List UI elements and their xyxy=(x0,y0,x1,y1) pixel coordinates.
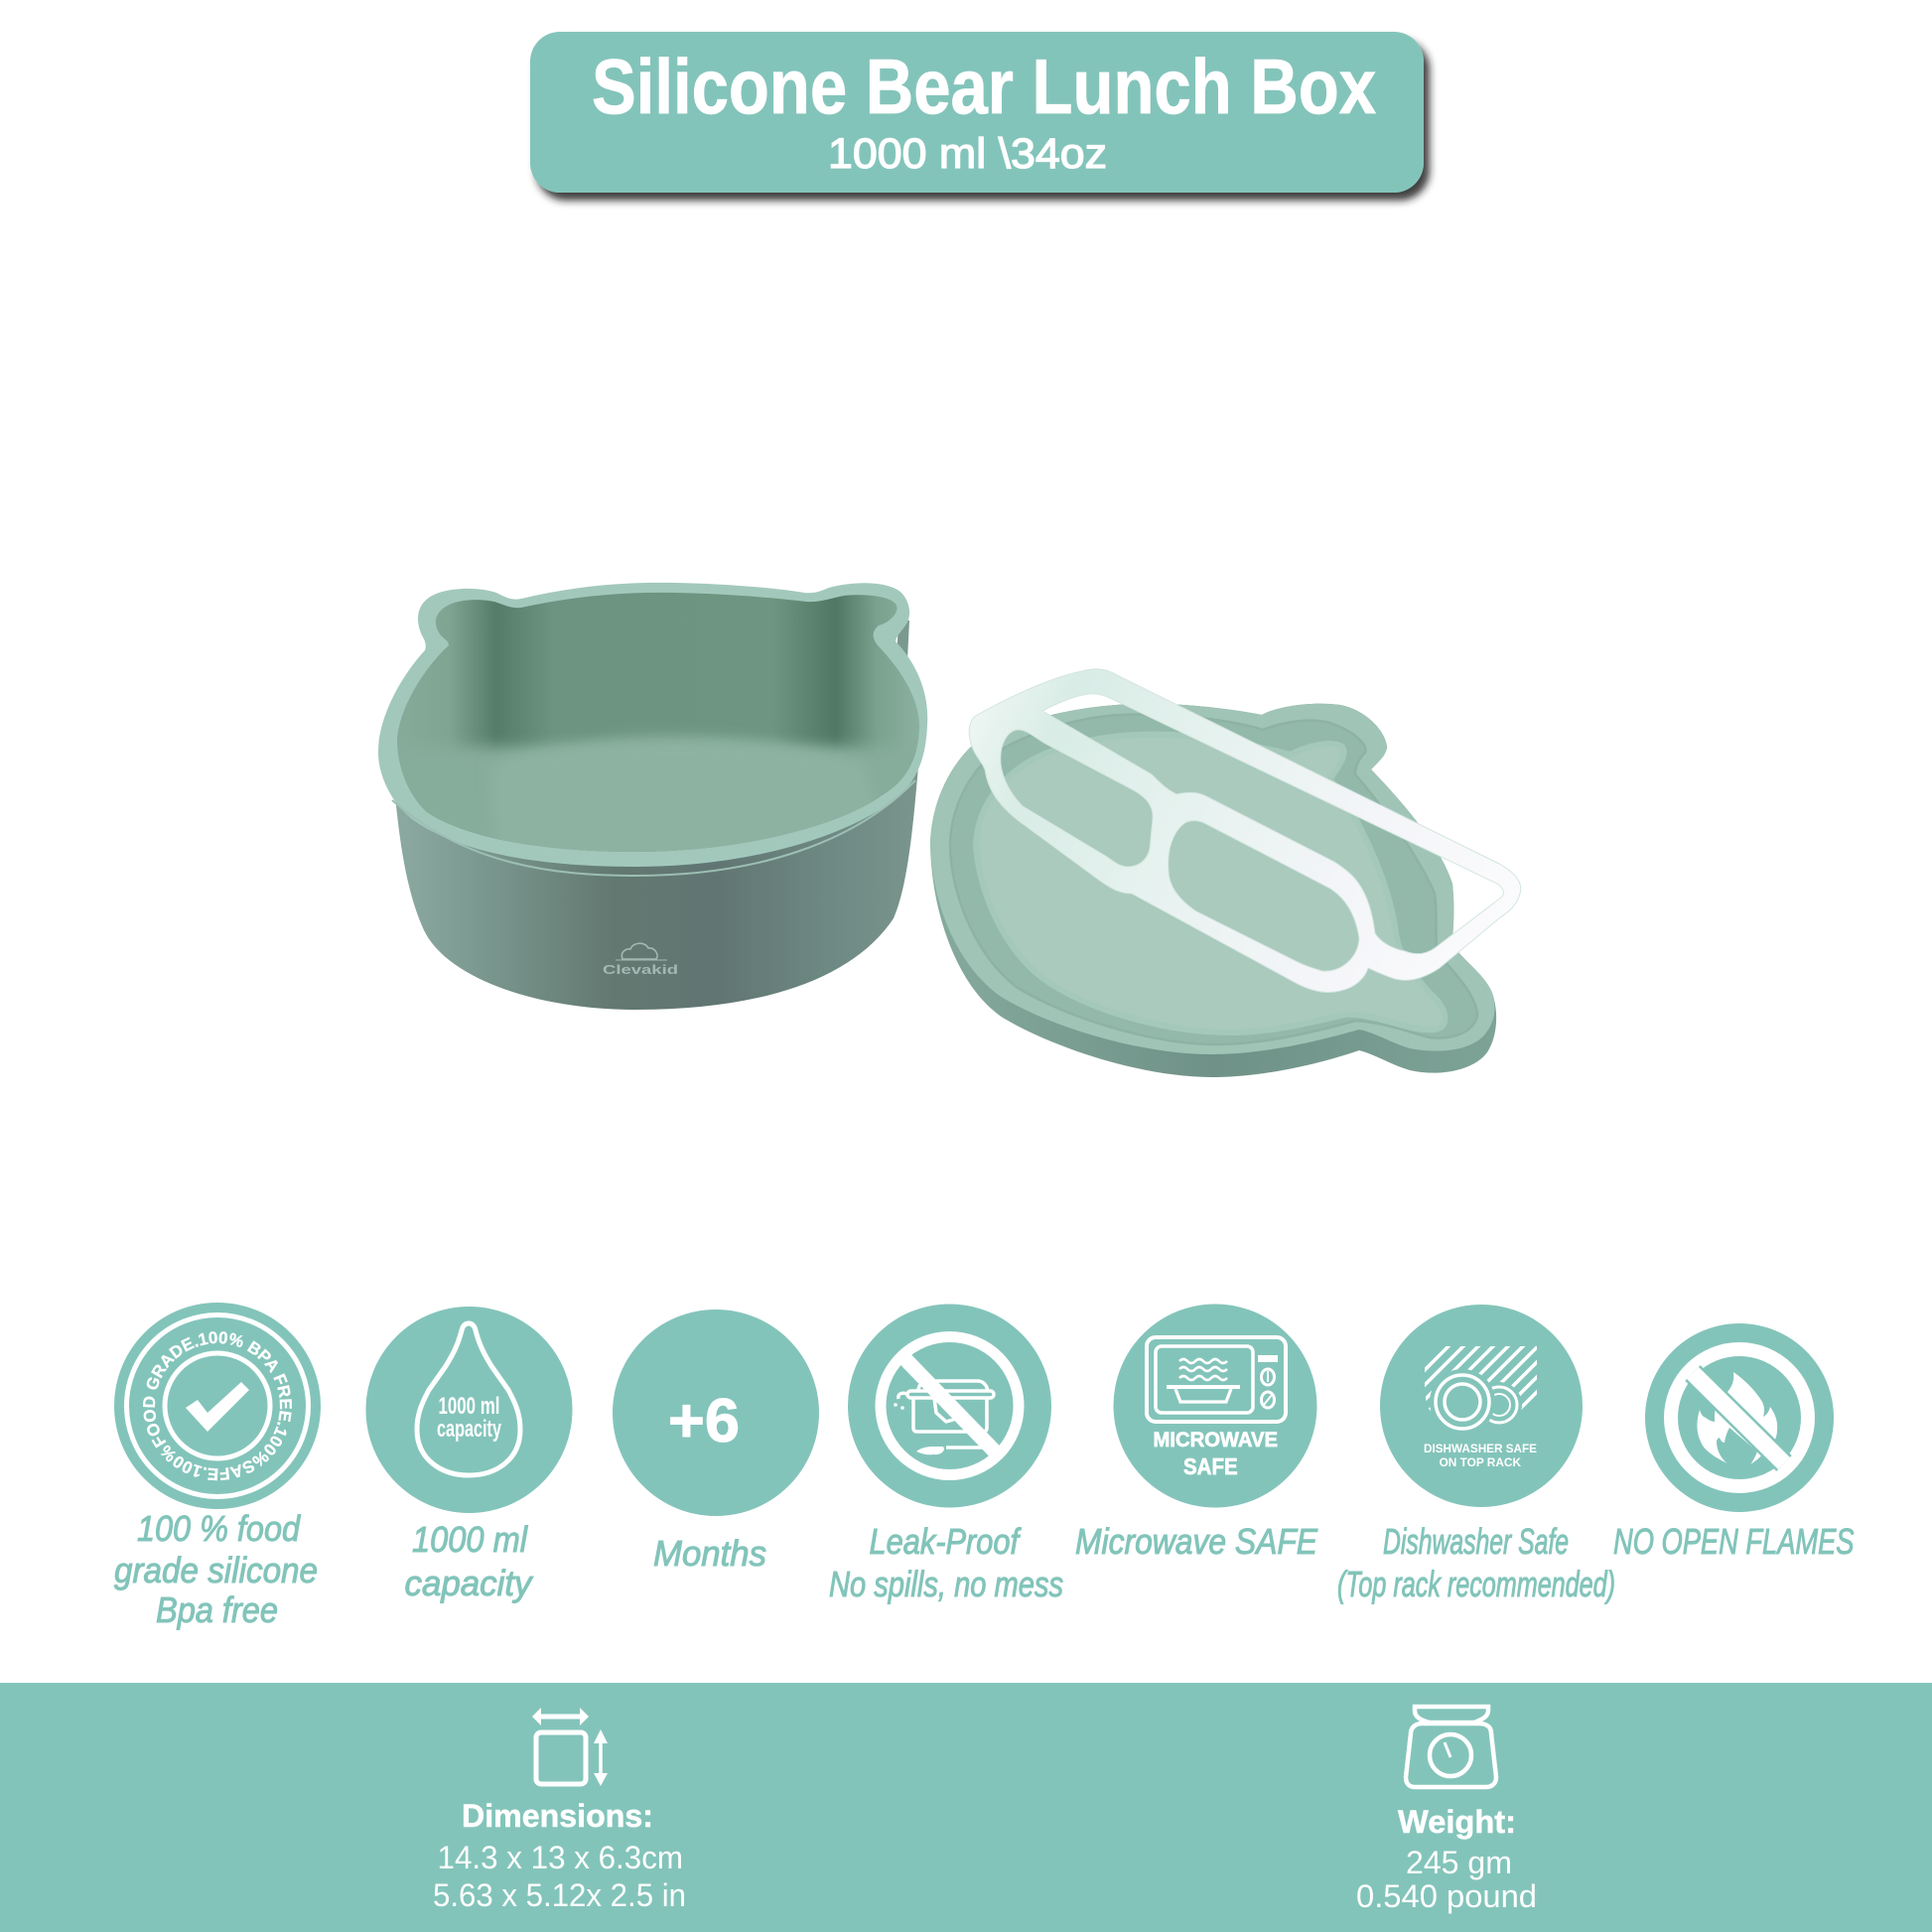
badge: age +6: +6 xyxy=(668,1387,740,1455)
brand logo: Clevakid xyxy=(603,962,678,977)
dimensions text: 5.63 x 5.12x 2.5 in xyxy=(433,1877,686,1913)
badge: dishwasher safe: ON TOP RACK xyxy=(1440,1457,1522,1469)
weight text: Weight: xyxy=(1398,1804,1516,1840)
badge: dishwasher safe xyxy=(1380,1305,1588,1507)
icon: dimensions xyxy=(532,1708,608,1786)
brand logo xyxy=(603,943,678,977)
title banner xyxy=(530,32,1424,193)
label: leak-proof: No spills, no mess xyxy=(829,1564,1063,1604)
label: food grade: 100 % food xyxy=(137,1508,301,1549)
icon: weighing scale xyxy=(1406,1707,1496,1787)
dimensions text: 14.3 x 13 x 6.3cm xyxy=(437,1840,683,1875)
label: capacity: 1000 ml xyxy=(412,1519,528,1560)
label: no open flames: NO OPEN FLAMES xyxy=(1613,1521,1855,1562)
label: microwave: Microwave SAFE xyxy=(1075,1521,1318,1562)
weight text: 0.540 pound xyxy=(1356,1878,1537,1914)
label: food grade xyxy=(114,1508,318,1630)
badge: capacity drop: 1000 ml xyxy=(439,1393,500,1420)
label: leak-proof: Leak-Proof xyxy=(870,1521,1022,1562)
label: food grade: Bpa free xyxy=(156,1589,278,1630)
label: dishwasher xyxy=(1337,1521,1615,1604)
label: food grade: grade silicone xyxy=(114,1550,318,1590)
label: dishwasher: (Top rack recommended) xyxy=(1337,1564,1615,1604)
product photo: lid with handle xyxy=(930,669,1521,1077)
label: months: Months xyxy=(653,1533,766,1574)
dimensions text: Dimensions: xyxy=(462,1798,653,1834)
specification band xyxy=(0,1683,1932,1932)
white divider handle xyxy=(969,669,1521,993)
badge: age +6 xyxy=(613,1310,819,1516)
badge: capacity drop xyxy=(365,1307,572,1513)
badge: microwave safe: SAFE xyxy=(1183,1453,1238,1479)
label: capacity: capacity xyxy=(405,1563,533,1603)
circular badge text: FOOD GRADE.100% BPA FREE.100%SAFE.100% xyxy=(143,1331,292,1481)
badge: capacity drop: capacity xyxy=(437,1416,501,1443)
weight text xyxy=(1356,1804,1537,1914)
badge: no open flames xyxy=(1645,1323,1834,1512)
weight text: 245 gm xyxy=(1406,1845,1512,1880)
title text: Silicone Bear Lunch Box xyxy=(592,43,1376,130)
badge: microwave safe xyxy=(1114,1305,1316,1507)
badge: microwave safe: MICROWAVE xyxy=(1154,1429,1278,1451)
icon: check mark xyxy=(186,1382,249,1432)
badge: food grade xyxy=(114,1303,321,1509)
label: capacity xyxy=(405,1519,533,1603)
dimensions text xyxy=(433,1798,686,1913)
badge: dishwasher safe: DISHWASHER SAFE xyxy=(1424,1444,1537,1455)
label: leak-proof xyxy=(829,1521,1063,1604)
product photo: bear bowl xyxy=(378,583,928,1010)
label: dishwasher: Dishwasher Safe xyxy=(1383,1521,1569,1562)
badge: leak-proof xyxy=(848,1305,1051,1507)
capacity subtitle: 1000 ml \34oz xyxy=(828,130,1107,178)
